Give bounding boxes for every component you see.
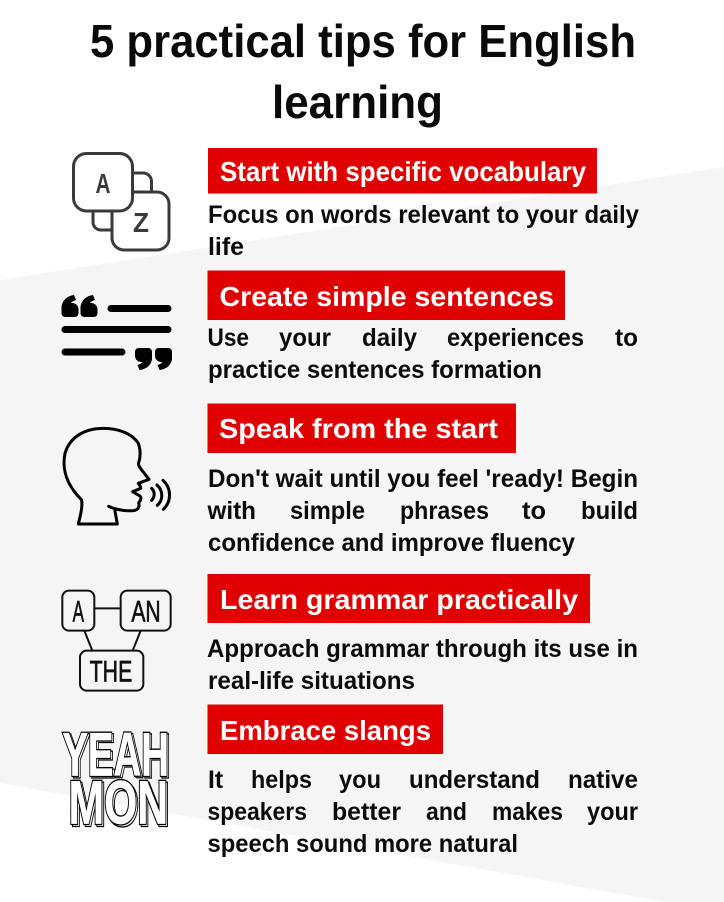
heading: create simple sentences	[208, 270, 565, 320]
heading: start with specific vocabulary	[208, 148, 597, 194]
text: tip 3 description: to	[522, 497, 546, 525]
text: tip 5 description: It	[208, 766, 224, 794]
text: tip 2 description: practice sentences formation	[208, 356, 542, 384]
icon: A Z letter cards: Z	[133, 207, 149, 238]
text: tip 5 description: helps	[251, 766, 312, 794]
text: tip 5 description: speech sound more natural	[208, 830, 518, 858]
icon: YEAH MON lettering: MON	[70, 769, 170, 838]
heading: learn grammar practically	[208, 574, 590, 623]
text: tip 2 description: your	[279, 324, 331, 352]
panel: tip 2 sentences	[62, 270, 638, 384]
panel: tip 4 grammar	[62, 574, 638, 695]
title	[90, 15, 636, 128]
icon: speaking head	[64, 428, 170, 524]
text: tip 4 description	[207, 635, 638, 695]
icon: quotation lines	[62, 295, 172, 370]
text: tip 5 description: speakers	[208, 798, 307, 826]
icon: YEAH MON lettering: YEAH	[62, 719, 169, 788]
icon: YEAH MON lettering: MON	[69, 768, 168, 837]
heading: embrace slangs	[208, 704, 443, 754]
icon: A AN THE diagram: AN	[131, 596, 161, 629]
text: tip 5 description: native	[568, 766, 638, 794]
text: tip 5 description: better	[332, 798, 401, 826]
heading: create simple sentences: Create simple sentences	[220, 281, 554, 312]
text: tip 3 description: confidence and improve fluency	[208, 529, 575, 557]
icon: A AN THE diagram: A	[73, 596, 84, 629]
text: tip 4 description: real-life situations	[208, 667, 415, 695]
text: tip 2 description	[208, 324, 638, 384]
heading: embrace slangs: Embrace slangs	[220, 715, 431, 746]
text: tip 5 description	[208, 766, 638, 858]
icon: YEAH MON lettering: YEAH	[62, 719, 169, 788]
text: tip 3 description: build	[581, 497, 638, 525]
text: tip 2 description: experiences	[447, 324, 584, 352]
heading: speak from the start	[208, 404, 516, 453]
heading: start with specific vocabulary: Start with specific vocabulary	[220, 156, 586, 187]
text: tip 2 description: daily	[362, 324, 417, 352]
text: tip 3 description: phrases	[400, 497, 489, 525]
text: tip 3 description: Don't wait until you feel 'ready! Begin	[208, 465, 638, 493]
icon: A AN THE diagram	[62, 591, 171, 691]
text: tip 5 description: you	[339, 766, 381, 794]
text: tip 2 description: to	[615, 324, 638, 352]
title: 5 practical tips for English	[90, 15, 636, 67]
text: tip 3 description	[207, 465, 638, 557]
icon: A Z letter cards: A	[96, 168, 110, 199]
heading: speak from the start: Speak from the start	[219, 413, 498, 444]
icon: YEAH MON lettering: YEAH	[64, 721, 171, 790]
text: tip 5 description: understand	[409, 766, 540, 794]
icon: A Z letter cards	[74, 154, 169, 250]
icon: A AN THE diagram: THE	[90, 656, 132, 689]
text: tip 5 description: and	[426, 798, 467, 826]
text: tip 1 description: life	[208, 233, 244, 261]
icon: YEAH MON lettering: MON	[69, 768, 168, 837]
icon: YEAH MON lettering: YEAH	[64, 721, 171, 790]
icon: YEAH MON lettering	[62, 719, 171, 838]
text: tip 3 description: with	[207, 497, 256, 525]
panel: tip 1 vocabulary	[74, 148, 639, 261]
text: tip 2 description: Use	[208, 324, 249, 352]
title: learning	[272, 76, 443, 128]
text: tip 5 description: your	[587, 798, 638, 826]
text: tip 5 description: makes	[492, 798, 563, 826]
text: tip 3 description: simple	[290, 497, 365, 525]
panel: tip 5 slang	[62, 704, 638, 858]
panel: tip 3 speaking	[64, 404, 638, 557]
text: tip 1 description: Focus on words relevant to your daily	[208, 201, 639, 229]
icon: YEAH MON lettering: MON	[70, 769, 170, 838]
heading: learn grammar practically: Learn grammar practically	[220, 584, 578, 615]
text: tip 1 description	[208, 201, 639, 261]
text: tip 4 description: Approach grammar through its use in	[207, 635, 638, 663]
